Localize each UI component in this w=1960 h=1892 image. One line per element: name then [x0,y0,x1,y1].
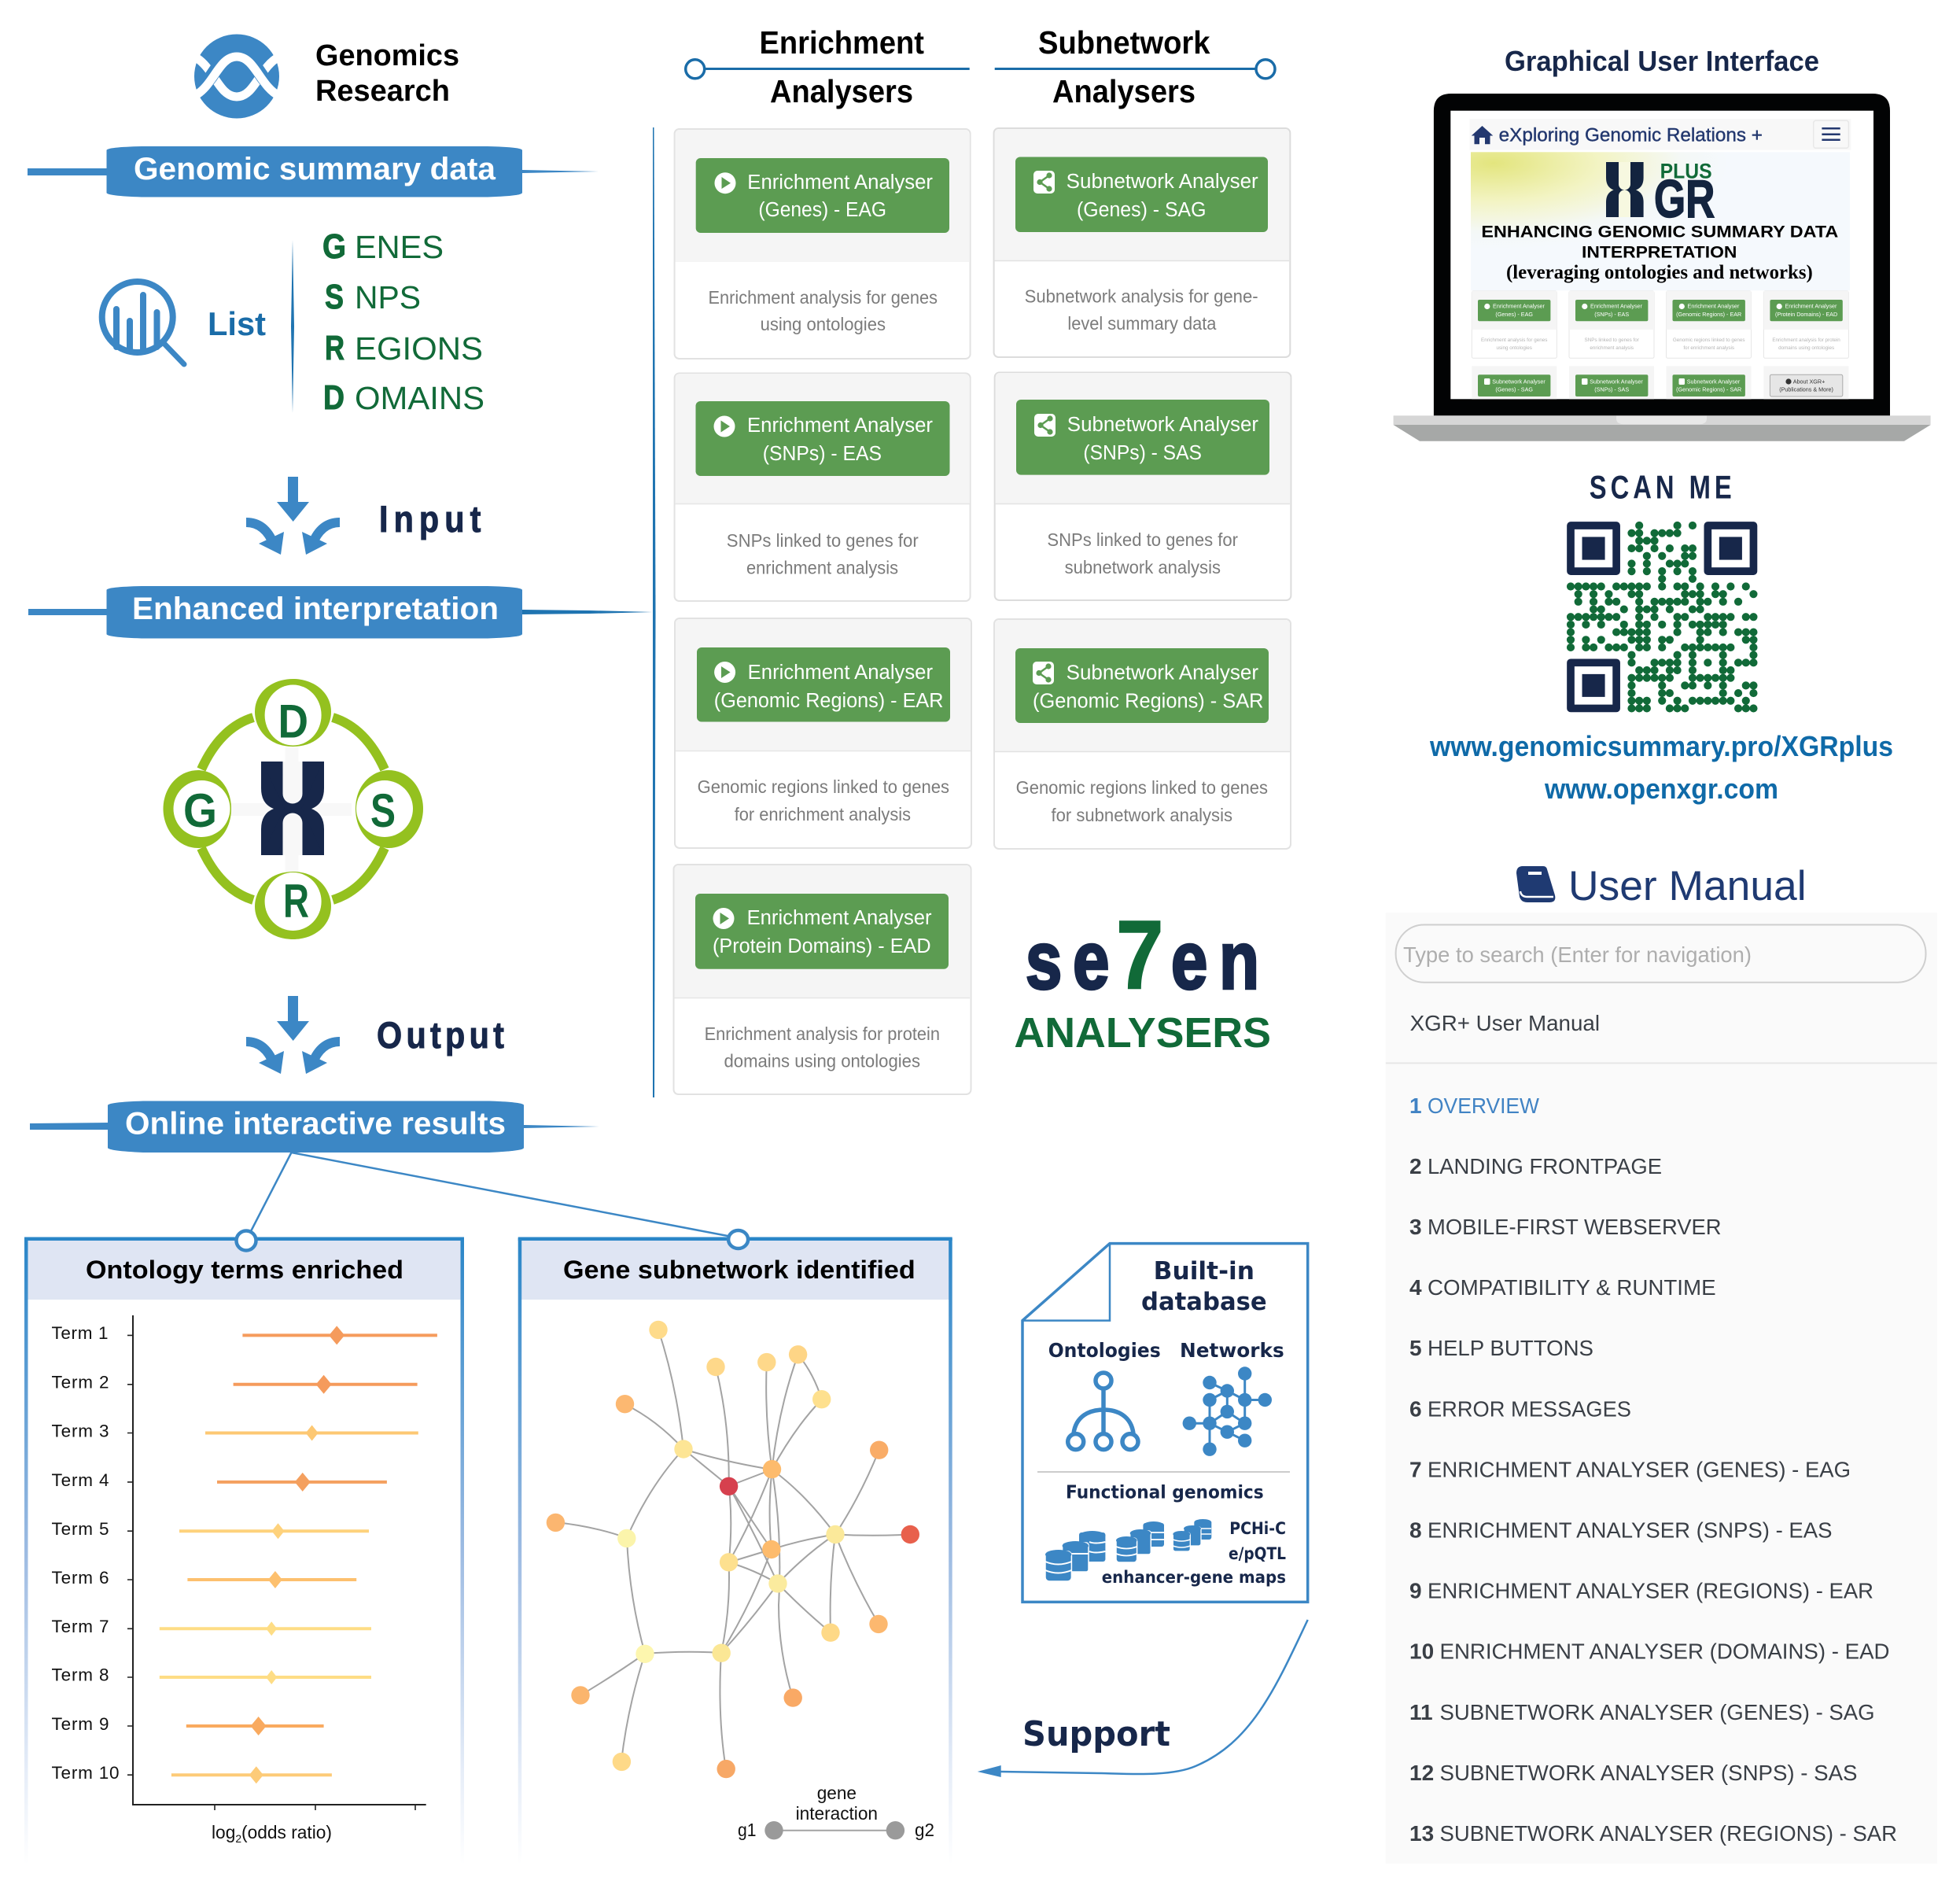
mini cards: (Publications & More) [1779,386,1833,393]
list: genes snps regions domains [322,227,484,417]
card: Subnetwork Analyser Genes [994,128,1290,357]
hero banner: (leveraging ontologies and networks) [1506,262,1813,283]
card: Subnetwork Analyser Genes: Subnetwork Analyser [1067,171,1258,193]
table of contents: 1 [1409,1094,1422,1118]
logo: GSDR ring with X: R [283,875,309,928]
mini cards: (Protein Domains) - EAD [1775,311,1837,318]
data types: enhancer-gene maps [1102,1568,1286,1587]
panel: built-in database [1022,1244,1308,1602]
label: List: List [208,305,266,342]
table of contents [1409,1094,1897,1846]
card: Enrichment Analyser Genes: Enrichment analysis for genes [708,287,938,308]
card: Subnetwork Analyser Genomic Regions: Subnetwork Analyser [1067,662,1259,684]
forest plot: Term 4 [52,1470,109,1490]
mini cards: Enrichment analysis for protein [1772,337,1840,343]
table of contents: SUBNETWORK ANALYSER (GENES) - SAG [1439,1700,1875,1724]
table of contents: 4 [1409,1275,1422,1300]
forest plot: Term 6 [52,1568,109,1588]
mini cards [1472,291,1848,399]
hero banner: GR [1654,169,1715,229]
forest plot: Term 10 [52,1763,120,1783]
heading: Genomics Research: Research [315,75,450,108]
mini cards: enrichment analysis [1590,345,1634,351]
logo: GSDR ring with X: G [183,784,217,837]
logo: GSDR ring with X: X [261,738,324,883]
card: Subnetwork Analyser SNPs: SNPs linked to genes for [1047,529,1238,550]
icon: genomics research logo [194,35,279,118]
card: Enrichment Analyser Protein Domains: Enrichment analysis for protein [705,1023,940,1044]
ontologies: Ontologies [1048,1339,1161,1362]
card: Subnetwork Analyser Genes: Subnetwork analysis for gene- [1025,286,1258,307]
mini cards: Subnetwork Analyser [1492,378,1546,385]
list: genes snps regions domains: ENES [355,229,444,265]
panel title: Gene subnetwork identified [563,1256,916,1284]
card: Enrichment Analyser Genes: (Genes) - EAG [758,199,886,221]
table of contents: HELP BUTTONS [1428,1336,1593,1360]
heading: User Manual: User Manual [1568,863,1807,909]
logo: se7en ANALYSERS: ANALYSERS [1014,1009,1271,1057]
card: Enrichment Analyser Genomic Regions [675,618,971,848]
card: Subnetwork Analyser Genomic Regions: (Genomic Regions) - SAR [1033,691,1263,713]
legend: gene interaction: gene [817,1783,857,1803]
heading: Subnetwork Analysers: Analysers [1052,73,1196,109]
card: Enrichment Analyser Genes [675,129,971,359]
logo: se7en ANALYSERS [1014,902,1271,1057]
table of contents: ERROR MESSAGES [1428,1396,1631,1421]
forest plot: Term 9 [52,1714,109,1734]
table of contents: ENRICHMENT ANALYSER (GENES) - EAG [1428,1457,1851,1481]
logo: GSDR ring with X [164,679,423,939]
legend: gene interaction: g2 [915,1820,934,1840]
table of contents: SUBNETWORK ANALYSER (SNPS) - SAS [1439,1761,1858,1785]
card: Subnetwork Analyser Genes: level summary data [1067,313,1217,334]
card: Subnetwork Analyser Genomic Regions: for subnetwork analysis [1051,805,1232,825]
mini cards: (Genes) - EAG [1495,311,1533,318]
table of contents: 10 [1409,1639,1434,1664]
table of contents: 11 [1409,1700,1433,1724]
heading: Genomics Research: Genomics [315,39,459,72]
heading: Enrichment Analysers [686,24,970,109]
forest plot: Term 7 [52,1617,109,1636]
panel: user manual sidebar [1386,913,1937,1864]
card: Subnetwork Analyser Genomic Regions: Genomic regions linked to genes [1016,777,1268,798]
mini cards: (Genes) - SAG [1495,386,1533,393]
table of contents: COMPATIBILITY & RUNTIME [1428,1275,1716,1300]
data types [1102,1519,1286,1587]
list: genes snps regions domains: R [325,329,344,367]
title: Built-in [1154,1257,1254,1285]
laptop: GUI screenshot [1394,94,1931,441]
card: Subnetwork Analyser SNPs: Subnetwork Analyser [1067,414,1259,436]
ontologies [1048,1339,1161,1450]
mini cards: About XGR+ [1793,378,1825,385]
networks: Networks [1180,1339,1284,1362]
heading: SCAN ME: SCAN ME [1590,468,1732,505]
mini cards: (SNPs) - EAS [1594,311,1629,318]
banner: Enhanced interpretation [28,586,653,639]
table of contents: 6 [1409,1396,1422,1421]
card: Subnetwork Analyser SNPs: subnetwork analysis [1065,557,1221,577]
hero banner: X [1606,147,1644,234]
search box: Type to search (Enter for navigation) [1403,942,1752,967]
table of contents: 2 [1409,1154,1422,1178]
banner: Enhanced interpretation: Enhanced interpretation [132,592,499,626]
functional genomics: Functional genomics [1066,1482,1264,1503]
mini cards: (Genomic Regions) - SAR [1676,386,1741,393]
icon: magnifier with bars [102,282,184,364]
panel: ontology terms enriched [24,1230,464,1864]
mini cards: Genomic regions linked to genes [1673,337,1745,343]
heading: Enrichment Analysers: Enrichment [760,24,924,61]
forest plot: Term 1 [52,1323,109,1343]
links: website urls [1429,730,1893,805]
arrow: database supports results [978,1620,1308,1777]
card: Enrichment Analyser SNPs: SNPs linked to genes for [727,530,919,551]
card: Enrichment Analyser Genomic Regions: for enrichment analysis [735,804,911,824]
card: Enrichment Analyser Protein Domains: domains using ontologies [724,1051,920,1071]
logo: GSDR ring with X: D [278,695,308,747]
card: Enrichment Analyser SNPs: enrichment analysis [746,558,898,578]
forest plot: Term 2 [52,1372,109,1392]
mini cards: SNPs linked to genes for [1585,337,1639,343]
mini cards: domains using ontologies [1778,345,1834,351]
title [1141,1257,1267,1316]
table of contents: SUBNETWORK ANALYSER (REGIONS) - SAR [1439,1821,1897,1846]
navbar [1469,119,1851,150]
vertical connector line [653,127,656,1097]
network graph [547,1321,919,1778]
mini cards: Enrichment Analyser [1785,303,1837,310]
forest plot: Term 5 [52,1519,109,1539]
data types: e/pQTL [1229,1544,1286,1563]
table of contents: 5 [1409,1336,1422,1360]
card: Enrichment Analyser Protein Domains: Enrichment Analyser [747,907,932,929]
mini cards: (SNPs) - SAS [1594,386,1629,393]
banner: Genomic summary data: Genomic summary data [134,152,496,186]
forest plot [52,1315,437,1845]
list: genes snps regions domains: NPS [355,279,421,315]
table of contents: 9 [1409,1579,1422,1603]
icon: output arrows [246,996,340,1074]
mini cards: Enrichment Analyser [1688,303,1740,310]
mini cards: using ontologies [1496,345,1532,351]
forest plot: Term 3 [52,1422,109,1441]
logo: se7en ANALYSERS: en [1171,915,1259,1006]
card: Subnetwork Analyser Genomic Regions [994,619,1291,849]
QR code [1571,526,1753,708]
links: website urls: www.openxgr.com [1544,773,1778,805]
card: Enrichment Analyser Protein Domains: (Protein Domains) - EAD [713,935,931,957]
card: Enrichment Analyser Genomic Regions: Genomic regions linked to genes [698,776,949,797]
card: Enrichment Analyser Genes: using ontologies [761,314,886,334]
label: Input: Input [379,500,481,540]
table of contents: 12 [1409,1761,1434,1785]
data types: PCHi-C [1229,1519,1286,1538]
logo: se7en ANALYSERS: se [1026,915,1109,1006]
hero banner: ENHANCING GENOMIC SUMMARY DATA [1481,223,1838,242]
hero banner [1471,147,1850,290]
legend: gene interaction [738,1783,934,1840]
label: Support: Support [1022,1714,1170,1754]
card: Enrichment Analyser Protein Domains [673,865,971,1094]
forest plot: Term 8 [52,1665,109,1685]
heading: Subnetwork Analysers [995,24,1275,109]
panel: gene subnetwork identified [518,1230,952,1864]
card: Enrichment Analyser SNPs: (SNPs) - EAS [763,443,882,465]
hero banner: PLUS [1660,160,1712,183]
panel title: Ontology terms enriched [86,1256,403,1284]
mini cards: Enrichment Analyser [1590,303,1643,310]
list: genes snps regions domains: EGIONS [355,330,483,367]
heading: Subnetwork Analysers: Subnetwork [1038,24,1210,61]
forest plot: 2 [235,1832,241,1845]
table of contents: 7 [1409,1457,1422,1481]
mini cards: (Genomic Regions) - EAR [1676,311,1741,318]
card: Enrichment Analyser Genes: Enrichment Analyser [747,171,934,194]
forest plot: log [212,1822,236,1842]
table of contents: MOBILE-FIRST WEBSERVER [1428,1215,1722,1239]
banner: Online interactive results [30,1101,599,1153]
heading: Enrichment Analysers: Analysers [770,73,913,109]
mini cards: Enrichment Analyser [1493,303,1546,310]
legend: gene interaction: interaction [796,1803,878,1824]
card: Subnetwork Analyser SNPs [995,373,1291,600]
card: Enrichment Analyser Genomic Regions: Enrichment Analyser [748,662,934,684]
card: Enrichment Analyser SNPs: Enrichment Analyser [747,415,934,437]
list: genes snps regions domains: G [322,227,346,266]
networks [1180,1339,1284,1456]
table of contents: ENRICHMENT ANALYSER (DOMAINS) - EAD [1439,1639,1889,1664]
forest plot: (odds ratio) [241,1822,332,1842]
table of contents: OVERVIEW [1428,1094,1540,1118]
list: genes snps regions domains: D [323,378,344,417]
banner: Online interactive results: Online interactive results [125,1106,506,1141]
mini cards: for enrichment analysis [1683,345,1734,351]
mini cards: Subnetwork Analyser [1590,378,1643,385]
table of contents: 8 [1409,1518,1422,1542]
label: Output: Output [377,1016,504,1057]
logo: se7en ANALYSERS: 7 [1116,902,1164,1010]
table of contents: 13 [1409,1821,1434,1846]
heading: Genomics Research [315,39,459,108]
manual title: XGR+ User Manual [1410,1011,1600,1035]
navbar: eXploring Genomic Relations + [1499,124,1763,146]
search box [1396,925,1925,983]
legend: gene interaction: g1 [738,1820,757,1840]
heading: Graphical User Interface: Graphical User Interface [1505,45,1819,77]
table of contents: LANDING FRONTPAGE [1428,1154,1662,1178]
connector: results to panels [251,1153,728,1236]
icon: input arrows [246,477,340,555]
card: Subnetwork Analyser SNPs: (SNPs) - SAS [1083,442,1202,464]
list: genes snps regions domains: S [325,278,344,316]
card: Subnetwork Analyser Genes: (Genes) - SAG [1077,199,1207,221]
icon: database stacks [1045,1519,1211,1581]
mini cards: Enrichment analysis for genes [1481,337,1547,343]
table of contents: ENRICHMENT ANALYSER (SNPS) - EAS [1428,1518,1833,1542]
table of contents: ENRICHMENT ANALYSER (REGIONS) - EAR [1428,1579,1873,1603]
title: database [1141,1288,1267,1316]
table of contents: 3 [1409,1215,1422,1239]
mini cards: Subnetwork Analyser [1687,378,1741,385]
logo: GSDR ring with X: S [370,784,396,837]
divider: list [291,240,294,413]
card: Enrichment Analyser SNPs [675,373,971,601]
list: genes snps regions domains: OMAINS [355,380,484,416]
card: Enrichment Analyser Genomic Regions: (Genomic Regions) - EAR [714,690,944,712]
links: website urls: www.genomicsummary.pro/XGRplus [1429,730,1893,762]
banner: Genomic summary data [28,146,599,197]
hero banner: INTERPRETATION [1582,243,1737,261]
